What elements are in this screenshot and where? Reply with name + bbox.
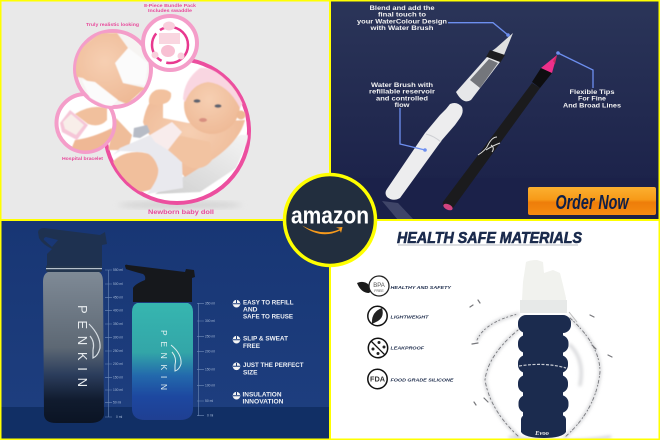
feature: BPA free: BPA (373, 283, 385, 289)
feature: lightweight: LIGHTWEIGHT (390, 314, 430, 320)
small bottle brand: PENKIN (159, 330, 169, 390)
silicone bottle: Evoo (534, 430, 550, 437)
callout text: Blend and add the (370, 5, 435, 12)
small bottle scale: 300 ml (205, 319, 215, 323)
callout text (357, 5, 622, 109)
small bottle scale: 250 ml (205, 334, 215, 338)
black pen (442, 55, 557, 212)
pen signature (478, 137, 500, 155)
water brush barrel (386, 103, 463, 200)
large bottle scale: 100 ml (113, 388, 123, 392)
callout text: with Water Brush (369, 25, 434, 32)
callout text: refillable reservoir (369, 89, 436, 96)
small bottle scale: 100 ml (205, 383, 215, 387)
callout text: and controlled (376, 95, 428, 102)
large bottle scale: 400 ml (113, 309, 123, 313)
panel: baby doll (0, 0, 330, 220)
large bottle brand: PENKIN (75, 305, 90, 387)
small bottle scale: 150 ml (205, 367, 215, 371)
amazon badge: amazon (291, 202, 369, 230)
feature list: SIZE (243, 370, 258, 377)
feature: leakproof (368, 338, 424, 358)
panel: penkin bottles (0, 220, 330, 440)
doll labels: Includes swaddle (148, 8, 192, 14)
callout text: And Broad Lines (563, 102, 622, 109)
feature list: JUST THE PERFECT (243, 362, 304, 369)
large bottle scale: 50 ml (113, 401, 121, 405)
large bottle scale: 0 ml (116, 415, 122, 419)
small bottle scale: 50 ml (205, 399, 213, 403)
icon: amazon smile (302, 226, 342, 234)
small bottle scale: 0 ml (207, 414, 213, 418)
callout lines (400, 23, 593, 150)
silicone bottle (518, 260, 577, 438)
feature list: EASY TO REFILL (243, 300, 294, 307)
order now button (528, 187, 656, 215)
water splash (470, 300, 612, 440)
large bottle scale: 150 ml (113, 375, 123, 379)
small bottle scale: 350 ml (205, 301, 215, 305)
panel: water brush (330, 0, 660, 220)
large bottle scale: 450 ml (113, 295, 123, 299)
large bottle scale: 550 ml (113, 268, 123, 272)
small bottle (125, 265, 195, 420)
doll labels: Truly realistic looking (86, 22, 139, 28)
water brush top section (456, 33, 513, 101)
callout text: flow (394, 102, 410, 109)
amazon badge (284, 174, 376, 266)
feature: BPA free: FREE (374, 289, 384, 293)
small bottle scale (197, 301, 215, 418)
doll labels: Newborn baby doll (148, 209, 214, 216)
feature list: SLIP & SWEAT (243, 336, 288, 343)
small bottle scale: 200 ml (205, 349, 215, 353)
large bottle scale: 300 ml (113, 335, 123, 339)
doll labels: Hospital bracelet (62, 156, 103, 162)
feature: FDA silicone (368, 369, 454, 389)
callout text: For Fine (578, 96, 607, 103)
feature list: SAFE TO REUSE (243, 314, 293, 321)
feature list (233, 300, 304, 405)
icons: bullets (233, 300, 240, 400)
large bottle scale: 350 ml (113, 322, 123, 326)
large bottle (38, 228, 107, 423)
large bottle scale (105, 268, 123, 419)
callout text: Flexible Tips (570, 89, 615, 96)
large bottle scale: 200 ml (113, 362, 123, 366)
doll labels: 8-Piece Bundle Pack (144, 3, 196, 9)
feature: lightweight (368, 306, 430, 326)
callout text: your WaterColour Design (357, 18, 447, 25)
doll labels (62, 3, 214, 216)
feature: leakproof: LEAKPROOF (390, 346, 424, 350)
callout text: final touch to (378, 12, 426, 19)
circle: bundle pack (143, 16, 197, 70)
feature list: AND (243, 307, 258, 314)
order now button: Order Now (556, 192, 630, 214)
panel: health safe materials (330, 220, 660, 440)
feature: FDA silicone: FOOD GRADE SILICONE (390, 378, 454, 382)
large bottle scale: 250 ml (113, 349, 123, 353)
title: HEALTH SAFE MATERIALS (397, 230, 583, 247)
large bottle scale: 500 ml (113, 282, 123, 286)
feature: BPA free (357, 276, 452, 296)
circle: hospital bracelet (56, 94, 114, 152)
splash across bottle (519, 364, 566, 368)
doll shadow (118, 201, 242, 209)
circle: realistic foot (72, 31, 151, 108)
callout text: Water Brush with (371, 82, 433, 89)
brush reflection (382, 201, 414, 220)
feature: FDA silicone: FDA (370, 376, 385, 384)
feature list: FREE (243, 343, 260, 350)
feature: BPA free: HEALTHY AND SAFETY (390, 285, 452, 290)
feature list: INSULATION (242, 391, 282, 398)
feature list: INNOVATION (242, 398, 284, 405)
main doll circle (105, 59, 250, 203)
